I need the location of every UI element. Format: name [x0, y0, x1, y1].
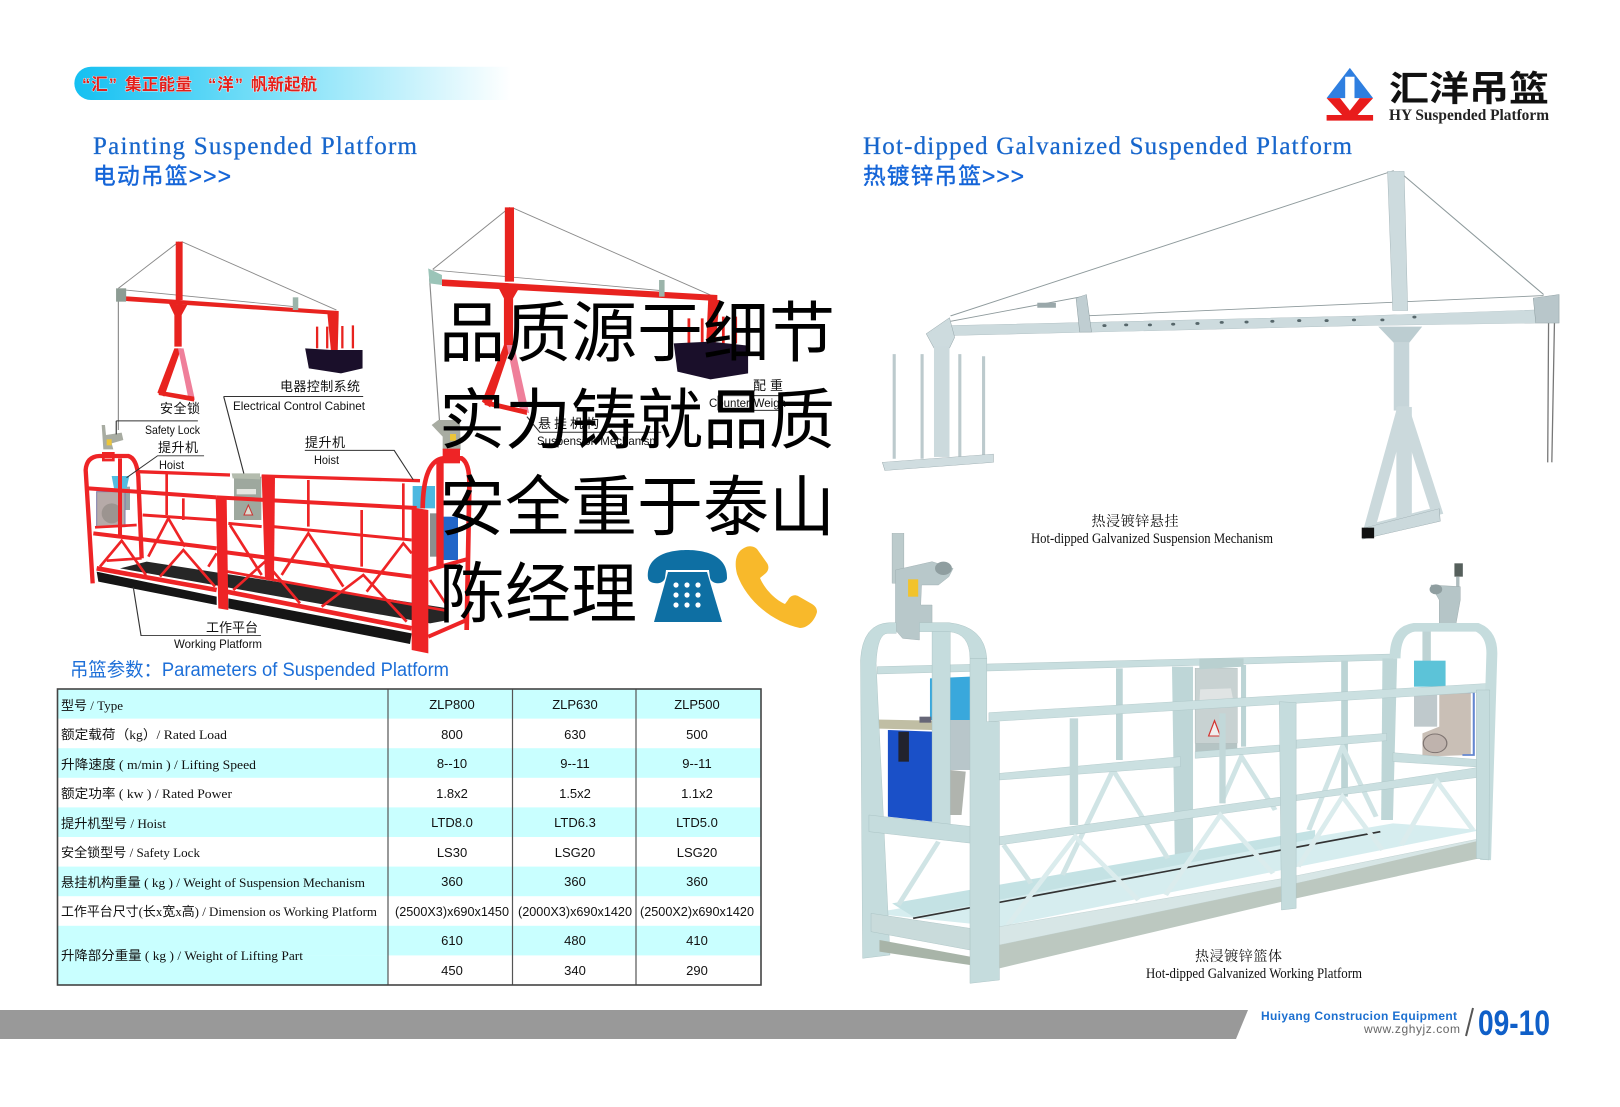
row: platform dimension [61, 904, 754, 919]
row: lifting speed [61, 756, 712, 772]
row: lifting speed: 8--10 [437, 756, 467, 771]
callout: electrical control cabinet: Electrical Control Cabinet [233, 399, 366, 413]
row: lifting speed: 9--11 [682, 756, 712, 771]
page number: 09-10 [1478, 1004, 1550, 1043]
parameters table heading: 吊篮参数：Parameters of Suspended Platform [70, 659, 449, 681]
row: hoist: LTD6.3 [554, 815, 596, 830]
row: type: ZLP500 [674, 697, 720, 712]
row: rated power: 额定功率 ( kw ) / Rated Power [61, 786, 233, 801]
row: weight of lifting part: 290 [686, 963, 708, 978]
row: weight of suspension mechanism: 悬挂机构重量 ( kg ) / Weight of Suspension Mechanism [61, 875, 365, 890]
right hoist [1393, 630, 1483, 767]
callout: right hoist [305, 432, 345, 467]
row: platform dimension: (2500X3)x690x1450 [395, 904, 509, 919]
small red suspension mechanism [116, 242, 363, 430]
footer company text [1261, 1009, 1460, 1036]
callout: suspension mechanism: 悬挂机构 [538, 413, 599, 432]
row: rated power: 1.8x2 [436, 786, 468, 801]
right hoist [413, 486, 458, 560]
overlay slogan text: 品质源于细节 [439, 280, 835, 376]
row: weight of suspension mechanism: 360 [686, 874, 708, 889]
row: rated power: 1.5x2 [559, 786, 591, 801]
row: weight of lifting part: 610 [441, 933, 463, 948]
heading: painting suspended platform [93, 133, 418, 189]
callout: counter-weight: 配 重 [753, 375, 783, 394]
header slogan banner: 集正能量 [125, 74, 192, 94]
red working platform [86, 420, 469, 653]
callout: left hoist: 提升机 [158, 437, 198, 456]
row: weight of suspension mechanism [61, 874, 708, 890]
header slogan banner: 帆新起航 [251, 74, 318, 94]
logo: 汇洋吊篮 [1389, 70, 1549, 109]
caption: galvanized suspension mechanism: 热浸镀锌悬挂 [1092, 513, 1178, 530]
control cabinet [232, 473, 261, 520]
row: safety lock: 安全锁型号 / Safety Lock [61, 845, 200, 860]
row: weight of suspension mechanism: 360 [441, 874, 463, 889]
header slogan banner: “汇” [82, 75, 117, 94]
left end frame [861, 623, 999, 983]
logo [1327, 68, 1549, 124]
front diagonals [1008, 782, 1473, 925]
row: type: ZLP800 [429, 697, 475, 712]
right end frame [1395, 627, 1492, 860]
row: platform dimension: (2000X3)x690x1420 [518, 904, 632, 919]
overlay slogan text: 安全重于泰山 [439, 454, 835, 550]
row: lifting speed: 升降速度 ( m/min ) / Lifting Speed [61, 757, 257, 772]
caption: galvanized working platform [1146, 948, 1363, 982]
front rails [989, 683, 1490, 845]
caption: galvanized suspension mechanism [1031, 513, 1274, 547]
row: rated load: 500 [686, 727, 708, 742]
footer bar [0, 1010, 1248, 1039]
row: rated load: 800 [441, 727, 463, 742]
callout: safety lock: Safety Lock [145, 423, 201, 437]
callout: working platform [174, 617, 262, 651]
row: weight of lifting part: 340 [564, 963, 586, 978]
callout: right hoist: 提升机 [305, 432, 345, 451]
row: weight of lifting part: 410 [686, 933, 708, 948]
row: hoist: LTD5.0 [676, 815, 718, 830]
callout: left hoist [158, 437, 198, 472]
back rail and back posts [877, 654, 1397, 877]
header slogan banner: “洋” [208, 74, 243, 94]
footer company text: www.zghyjz.com [1363, 1022, 1460, 1036]
row: safety lock [61, 845, 717, 860]
row: weight of lifting part: 升降部分重量 ( kg ) / Weight of Lifting Part [61, 948, 303, 963]
back rails and posts [107, 472, 447, 611]
heading: hot-dipped galvanized suspended platform: 热镀锌吊篮>>> [863, 163, 1024, 189]
red suspension mechanisms illustration [116, 207, 748, 430]
heading: painting suspended platform: Painting Suspended Platform [93, 133, 418, 160]
row: safety lock: LSG20 [555, 845, 595, 860]
callout: safety lock: 安全锁 [160, 398, 200, 417]
skirt and base [871, 702, 1481, 968]
row: hoist: LTD8.0 [431, 815, 473, 830]
callout: suspension mechanism [537, 413, 659, 448]
row: rated power [61, 786, 713, 801]
row: hoist: 提升机型号 / Hoist [61, 816, 166, 831]
caption: galvanized suspension mechanism: Hot-dipped Galvanized Suspension Mechanism [1031, 531, 1274, 547]
overlay slogan text [439, 280, 835, 637]
callout: counter-weight: Counter-Weigh [709, 396, 786, 410]
row: rated load [61, 727, 708, 742]
left hoist [97, 476, 130, 527]
heading: painting suspended platform: 电动吊篮>>> [93, 163, 231, 189]
logo: HY Suspended Platform [1389, 107, 1549, 124]
heading: hot-dipped galvanized suspended platform: Hot-dipped Galvanized Suspended Platform [863, 133, 1353, 160]
row: weight of suspension mechanism: 360 [564, 874, 586, 889]
callout: right hoist: Hoist [314, 453, 340, 467]
large red suspension mechanism [428, 207, 748, 423]
parameters table [57, 689, 761, 985]
callout: suspension mechanism: Suspension Mechanism [537, 434, 659, 448]
safety locks [102, 420, 461, 450]
floor [871, 823, 1481, 927]
row: platform dimension: (2500X2)x690x1420 [640, 904, 754, 919]
footer divider slash [1466, 1008, 1473, 1036]
icon: blue telephone [648, 550, 727, 622]
callout: electrical control cabinet [233, 376, 366, 413]
callout leader lines [116, 396, 785, 636]
overlay slogan text: 陈经理 [439, 541, 637, 637]
row: rated load: 630 [564, 727, 586, 742]
callout: safety lock [145, 398, 201, 437]
front frame [86, 453, 469, 637]
galvanized suspension mechanism illustration [882, 171, 1559, 539]
icon: yellow handset [736, 546, 817, 628]
row: hoist [61, 815, 718, 831]
footer company text: Huiyang Construcion Equipment [1261, 1009, 1457, 1023]
row: platform dimension: 工作平台尺寸(长x宽x高) / Dimension os Working Platform [61, 904, 377, 919]
callout: electrical control cabinet: 电器控制系统 [280, 376, 360, 395]
row: weight of lifting part [61, 933, 708, 978]
control cabinet [1195, 658, 1244, 752]
icon: company logo [1327, 68, 1373, 121]
row: type: ZLP630 [552, 697, 598, 712]
row: weight of lifting part: 480 [564, 933, 586, 948]
heading: hot-dipped galvanized suspended platform [863, 133, 1353, 189]
back diagonals [898, 747, 1376, 905]
black floor and skirt [97, 562, 448, 644]
callout: counter-weight [709, 375, 786, 410]
row: weight of lifting part: 450 [441, 963, 463, 978]
left safety lock [892, 533, 953, 640]
row: type: 型号 / Type [61, 698, 123, 713]
caption: galvanized working platform: Hot-dipped Galvanized Working Platform [1146, 966, 1363, 982]
callout: left hoist: Hoist [159, 458, 185, 472]
row: rated power: 1.1x2 [681, 786, 713, 801]
right safety lock [1430, 563, 1463, 623]
callout: working platform: 工作平台 [206, 617, 258, 636]
row: rated load: 额定载荷（kg）/ Rated Load [61, 727, 228, 742]
overlay slogan text: 实力铸就品质 [439, 367, 835, 463]
row: type [61, 697, 720, 713]
row: lifting speed: 9--11 [560, 756, 590, 771]
row: safety lock: LS30 [437, 845, 467, 860]
caption: galvanized working platform: 热浸镀锌篮体 [1195, 948, 1282, 965]
row: safety lock: LSG20 [677, 845, 717, 860]
left hoist [867, 677, 970, 822]
header slogan banner [74, 67, 511, 100]
galvanized working platform illustration [861, 533, 1492, 983]
callout: working platform: Working Platform [174, 637, 262, 651]
